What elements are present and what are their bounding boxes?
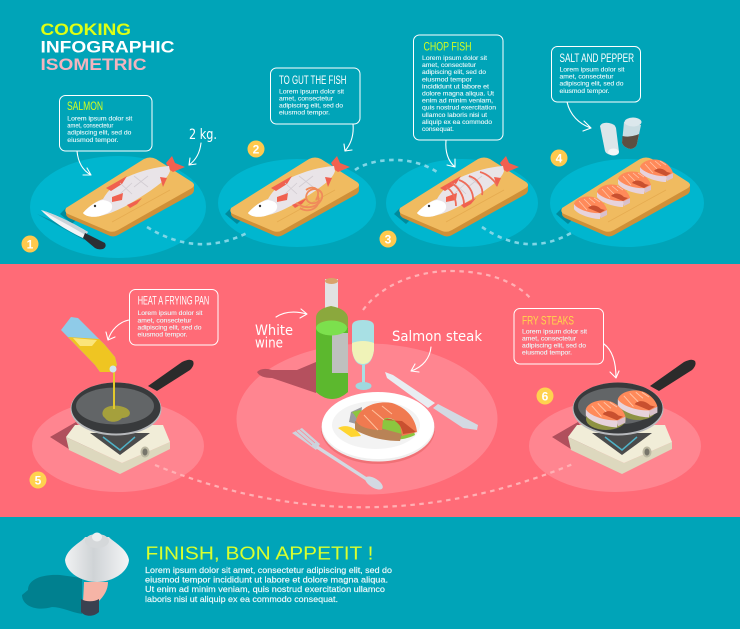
- callout: chop fish: Lorem ipsum dolor sit: [422, 55, 487, 62]
- dashed path: top band connectors: [147, 160, 571, 244]
- title: ISOMETRIC: [40, 55, 146, 74]
- callout: salmon: SALMON: [67, 99, 103, 113]
- badge: step 1: 1: [27, 237, 34, 251]
- center: plate with salmon steak: [321, 392, 435, 464]
- callout: chop fish: dolore magna aliqua. Ut: [422, 90, 494, 98]
- step 2: gutted salmon: [218, 156, 376, 247]
- top background band: [0, 0, 740, 264]
- callout: to gut the fish: adipiscing elit, sed do: [279, 103, 343, 110]
- callout: salmon: amet, consectetur: [67, 122, 114, 130]
- callout: chop fish: incididunt ut labore et: [422, 83, 489, 90]
- callout: salt and pepper: [552, 46, 640, 131]
- heading: finish: FINISH, BON APPETIT !: [146, 542, 374, 564]
- callout: fry steaks: eiusmod tempor.: [522, 350, 572, 357]
- oil pool: [102, 406, 130, 422]
- icon: salt and pepper shakers: [600, 118, 642, 156]
- badge: step 2: [248, 140, 264, 158]
- label: 2 kg: 2 kg.: [189, 127, 217, 143]
- callout: chop fish: aliquip ex ea commodo: [422, 119, 492, 126]
- step 1: salmon on board: [30, 156, 206, 258]
- callout: chop fish: adipiscing elit, sed do: [422, 69, 486, 76]
- step 4: salmon steaks: [550, 118, 704, 247]
- fish cut stripes: [446, 172, 497, 206]
- callout: to gut the fish: amet, consectetur: [279, 96, 334, 103]
- callout: to gut the fish: Lorem ipsum dolor sit: [279, 88, 344, 95]
- badge: step 1: [22, 236, 38, 252]
- badge: step 5: [30, 472, 46, 488]
- label: white wine: White: [255, 323, 293, 339]
- callout: heat a frying pan: HEAT A FRYING PAN: [138, 294, 209, 308]
- label: white wine: [255, 309, 307, 352]
- label: 2 kg: [189, 127, 217, 165]
- callout: chop fish: consequat.: [422, 126, 454, 133]
- step 5: pan on stove: [50, 317, 194, 474]
- text block: finish body: eiusmod tempor incididunt ut labore et dolore magna aliqua.: [145, 574, 388, 584]
- badge: step 4: [550, 150, 568, 166]
- label: salmon steak: [392, 329, 483, 372]
- title: [40, 20, 174, 74]
- callout: salt and pepper: adipiscing elit, sed do: [560, 80, 624, 88]
- icon: knife: [37, 210, 106, 249]
- center: wine bottle: [257, 278, 348, 399]
- callout: chop fish: amet, consectetur: [422, 62, 477, 69]
- step 6 base: pink ellipse: [529, 400, 701, 492]
- step 6: pan with steaks: [552, 360, 696, 474]
- callout: salmon: Lorem ipsum dolor sit: [67, 116, 132, 122]
- callout: heat a frying pan: [106, 290, 218, 345]
- callout: chop fish: enim ad minim veniam,: [422, 98, 493, 105]
- callout: chop fish: [414, 35, 503, 167]
- bottom background band: [0, 517, 740, 629]
- badge: step 3: [380, 230, 396, 248]
- callout: chop fish: quis nostrud exercitation: [422, 105, 496, 112]
- callout: heat a frying pan: amet, consectetur: [138, 317, 192, 324]
- callout: salmon: adipiscing elit, sed do: [67, 130, 132, 136]
- text block: finish body: [145, 565, 392, 604]
- callout: fry steaks: Lorem ipsum dolor sit: [522, 328, 587, 335]
- badge: step 5: 5: [35, 473, 42, 487]
- badge: step 6: 6: [542, 389, 549, 403]
- callout: heat a frying pan: eiusmod tempor.: [138, 331, 188, 338]
- callout: chop fish: ullamco laboris nisi ut: [422, 112, 487, 119]
- callout: salmon: [60, 96, 152, 175]
- callout: to gut the fish: [270, 68, 360, 151]
- center: wine glass: [352, 320, 374, 390]
- callout: fry steaks: [514, 308, 619, 378]
- center: fork: [292, 428, 385, 492]
- callout: to gut the fish: eiusmod tempor.: [279, 110, 330, 117]
- middle background band: [0, 264, 740, 517]
- label: white wine: wine: [255, 336, 283, 352]
- icon: cloche held by hand: [22, 532, 129, 616]
- text block: finish body: Ut enim ad minim veniam, quis nostrud exercitation ullamco: [145, 584, 385, 594]
- callout: fry steaks: amet, consectetur: [522, 336, 577, 343]
- center base: pink ellipse: [236, 344, 498, 494]
- badge: step 3: 3: [385, 232, 392, 246]
- callout: chop fish: CHOP FISH: [424, 40, 472, 54]
- callout: salt and pepper: Lorem ipsum dolor sit: [560, 66, 625, 73]
- oil stream: [113, 372, 115, 409]
- callout: heat a frying pan: adipiscing elit, sed do: [138, 324, 202, 331]
- step 5 base: pink ellipse: [32, 400, 204, 492]
- badge: step 6: [536, 388, 554, 404]
- title: COOKING: [40, 20, 131, 39]
- icon: oil bottle: [61, 317, 117, 372]
- badge: step 2: 2: [253, 142, 260, 156]
- text block: finish body: laboris nisi ut aliquip ex ea commodo consequat.: [145, 594, 338, 604]
- callout: salt and pepper: amet, consectetur: [560, 74, 614, 80]
- badge: step 4: 4: [556, 151, 563, 165]
- title: INFOGRAPHIC: [40, 38, 174, 56]
- callout: fry steaks: adipiscing elit, sed do: [522, 343, 586, 350]
- callout: heat a frying pan: Lorem ipsum dolor sit: [138, 310, 203, 317]
- callout: to gut the fish: TO GUT THE FISH: [279, 73, 346, 87]
- label: salmon steak: Salmon steak: [392, 329, 483, 345]
- icon: fried oil patches: [586, 408, 626, 430]
- dashed path: middle band connectors: [155, 271, 573, 507]
- callout: salmon: eiusmod tempor.: [67, 137, 118, 144]
- center: knife: [385, 372, 478, 430]
- callout: chop fish: eiusmod tempor: [422, 76, 473, 83]
- callout: fry steaks: FRY STEAKS: [522, 314, 574, 328]
- step 3: chopped salmon: [386, 156, 538, 247]
- icon: intestines: [296, 188, 322, 210]
- callout: salt and pepper: eiusmod tempor.: [560, 88, 610, 95]
- text block: finish body: Lorem ipsum dolor sit amet, consectetur adipiscing elit, sed do: [145, 565, 392, 575]
- callout: salt and pepper: SALT AND PEPPER: [560, 51, 634, 65]
